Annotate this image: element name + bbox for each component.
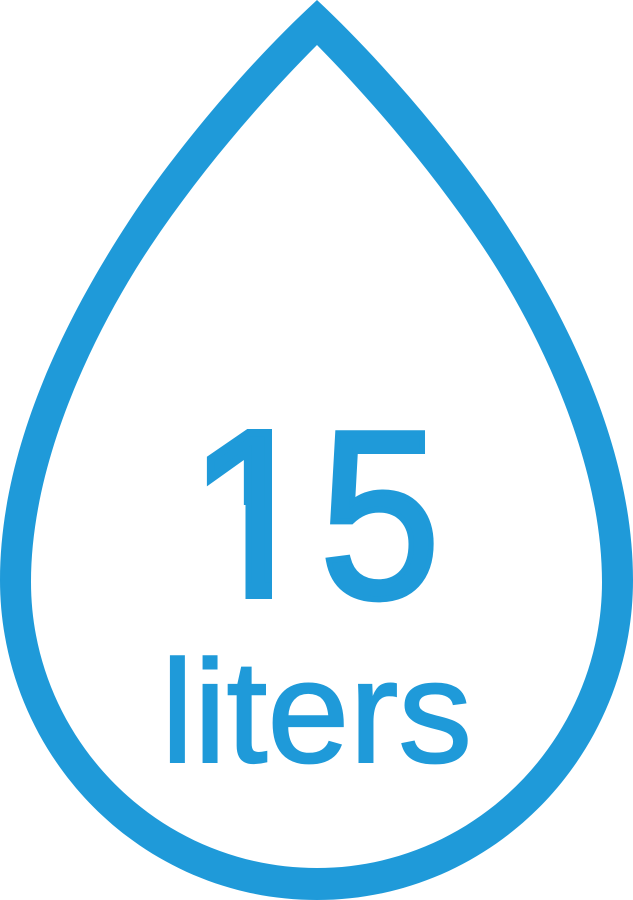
unit label: liters: liters (161, 630, 472, 793)
number: 15: 1 (188, 382, 320, 647)
number: 15 (206, 429, 434, 602)
number: 15: 5 (320, 383, 440, 648)
